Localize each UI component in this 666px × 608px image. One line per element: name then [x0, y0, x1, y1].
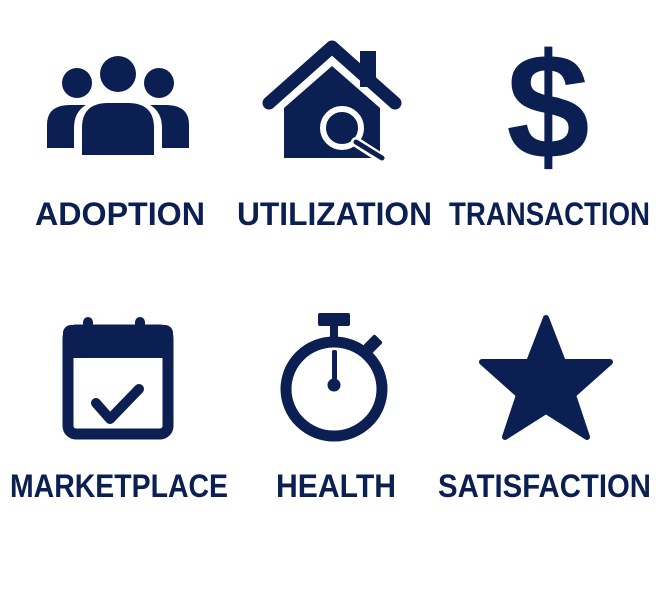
label: UTILIZATION: UTILIZATION [237, 196, 432, 232]
label: MARKETPLACE: MARKETPLACE [10, 468, 228, 504]
label: ADOPTION: ADOPTION [35, 196, 205, 232]
icon: dollar (transaction): $ [506, 22, 590, 190]
icon: house with magnifier (utilization) [269, 47, 395, 160]
label: SATISFACTION: SATISFACTION [438, 468, 651, 504]
icon: calendar check (marketplace) [63, 317, 173, 434]
icon: star (satisfaction) [482, 318, 610, 437]
label: HEALTH: HEALTH [276, 468, 396, 504]
icon: people (adoption) [47, 56, 189, 155]
icon: stopwatch (health) [286, 313, 383, 436]
